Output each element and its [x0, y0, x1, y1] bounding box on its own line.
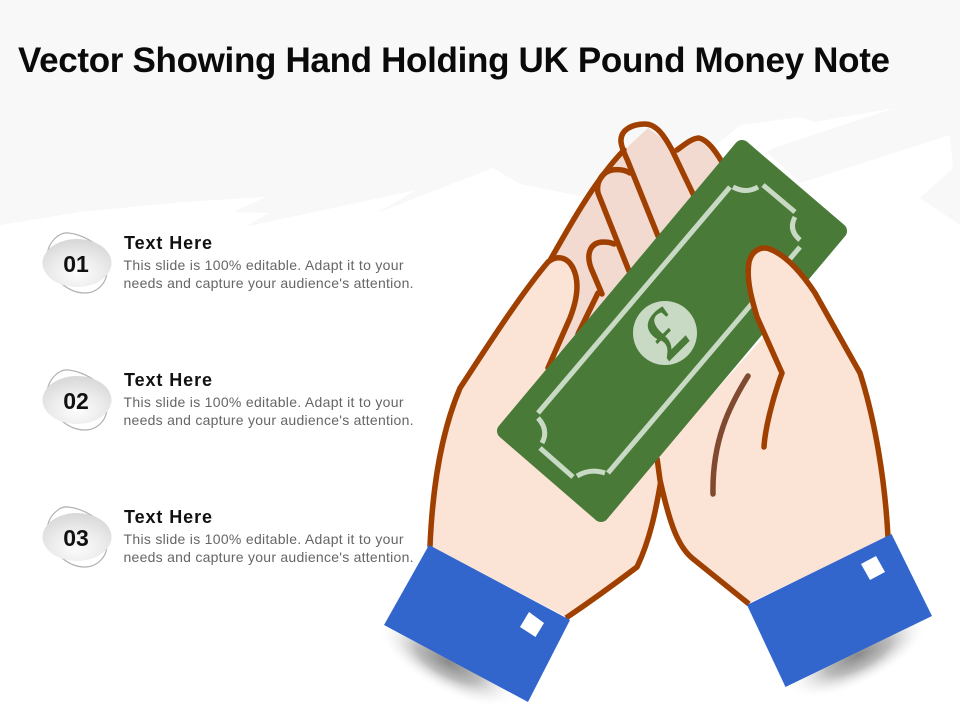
back hand fingers: [548, 124, 725, 365]
money note: [505, 148, 839, 514]
note border: [538, 185, 800, 477]
heading 01: Text Here: [124, 233, 212, 253]
left cufflink: [520, 612, 544, 637]
left cuff: [384, 545, 570, 702]
title: Vector Showing Hand Holding UK Pound Money Note: [18, 41, 890, 80]
badge 02: 02: [63, 388, 89, 414]
right cuff: [747, 534, 932, 687]
cuff shadow left: [366, 599, 530, 720]
right cufflink: [861, 556, 885, 580]
illustration: hands holding pound note: [366, 124, 941, 720]
badge 03: [42, 507, 112, 567]
left hand: [430, 258, 661, 618]
body 03: needs and capture your audience's attention.: [124, 549, 414, 565]
palm crease: [713, 376, 748, 494]
cuff shadow right: [775, 594, 941, 716]
badge 02: [42, 370, 112, 430]
list item 02: [42, 370, 414, 430]
badge 01: 01: [63, 251, 89, 277]
right hand palm: [657, 330, 888, 604]
thumb outline: [748, 248, 888, 537]
torn paper background band: [0, 0, 960, 227]
pound coin: £: [625, 293, 705, 373]
right thumb and hand front: [748, 248, 888, 600]
list item 01: [42, 233, 414, 293]
body 02: This slide is 100% editable. Adapt it to your: [124, 394, 404, 410]
heading 03: Text Here: [124, 507, 212, 527]
body 02: needs and capture your audience's attention.: [124, 412, 414, 428]
list item 03: [42, 507, 414, 567]
body 03: This slide is 100% editable. Adapt it to your: [124, 531, 404, 547]
badge 03: 03: [63, 525, 89, 551]
body 01: needs and capture your audience's attention.: [124, 275, 414, 291]
badge 01: [42, 233, 112, 293]
body 01: This slide is 100% editable. Adapt it to your: [124, 257, 404, 273]
heading 02: Text Here: [124, 370, 212, 390]
